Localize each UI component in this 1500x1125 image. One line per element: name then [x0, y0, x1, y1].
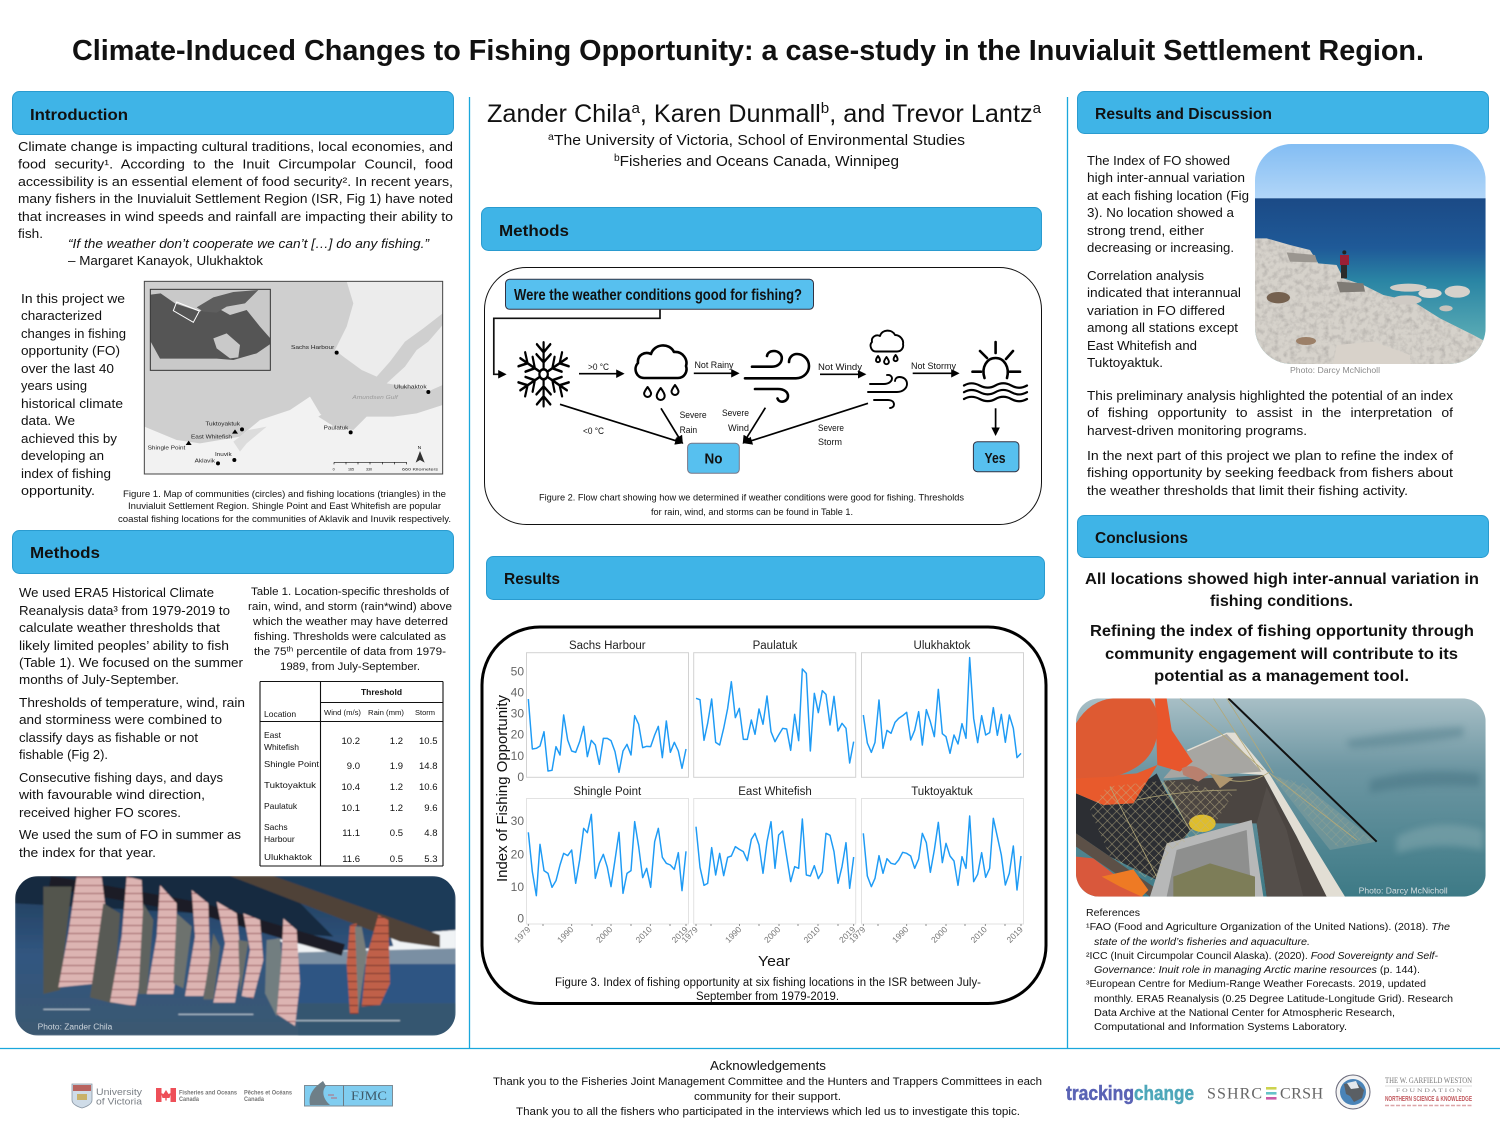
- flow labels: Severe: [680, 410, 707, 421]
- heading: conclusions: [1078, 516, 1488, 558]
- flow outcome: yes: [973, 442, 1019, 472]
- chart: Shingle Point: Shingle Point: [573, 786, 642, 798]
- map: Inuvialuit Settlement Region: Shingle Point: [148, 445, 186, 451]
- photo: hauling fishing net: [1076, 698, 1486, 897]
- chart y axis labels: 20: [511, 728, 524, 742]
- text block: results text: harvest-driven monitoring programs.: [1087, 423, 1307, 438]
- chart y axis labels: 0: [517, 770, 524, 784]
- flow outcome: yes: Yes: [984, 450, 1006, 467]
- authors and affiliations: a: [548, 132, 554, 143]
- text block: results text: strong trend, either: [1087, 223, 1205, 238]
- logo: tracking change: [1066, 1083, 1194, 1105]
- heading: methods centre: Methods: [499, 223, 569, 240]
- map: Inuvialuit Settlement Region: 0: [333, 467, 335, 471]
- flow labels: Not Stormy: [911, 361, 956, 372]
- table 1 caption: Table 1. Location-specific thresholds of: [251, 586, 450, 598]
- text block: methods description: We used ERA5 Historical Climate: [19, 585, 214, 600]
- flow labels: Wind: [728, 423, 749, 434]
- text block: results text: The Index of FO showed: [1087, 153, 1230, 168]
- table 1: thresholds: Storm: [415, 708, 435, 717]
- chart y axis labels: 20: [511, 847, 524, 861]
- text block: methods description: calculate weather thresholds that: [19, 620, 220, 635]
- chart x axis labels: 2019: [1004, 924, 1025, 945]
- chart: East Whitefish: East Whitefish: [738, 786, 812, 798]
- text block: methods description: Reanalysis data³ from 1979-2019 to: [19, 603, 230, 618]
- references: ²ICC (Inuit Circumpolar Council Alaska). (2020). Food Sovereignty and Self-: [1086, 951, 1439, 962]
- text block: introduction paragraph: many fishers in the Inuvialuit Settlement Region (ISR, Fig 1) have noted: [18, 191, 453, 206]
- quote: [68, 236, 430, 268]
- chart x axis labels: 2019: [837, 924, 858, 945]
- authors and affiliations: b: [614, 153, 620, 164]
- map: Inuvialuit Settlement Region: Inuvik: [215, 452, 232, 458]
- logo: circular seal: [1336, 1075, 1370, 1109]
- chart y axis labels: [511, 664, 524, 926]
- text block: results text: [1087, 153, 1454, 498]
- chart: Tuktoyaktuk: Tuktoyaktuk: [911, 786, 973, 798]
- table 1: thresholds: 5.3: [424, 854, 438, 865]
- chart x axis labels: 1990: [555, 924, 576, 945]
- text block: project summary: index of fishing: [21, 466, 111, 481]
- chart y axis labels: 30: [511, 707, 524, 721]
- acknowledgements: Acknowledgements: [710, 1059, 826, 1073]
- figure 1 caption: Inuvialuit Settlement Region. Shingle Point and East Whitefish are popular: [128, 500, 441, 511]
- table 1: thresholds: 10.2: [342, 736, 360, 747]
- text block: project summary: historical climate: [21, 396, 123, 411]
- text block: conclusions: fishing conditions.: [1210, 593, 1353, 610]
- logo: SSHRC CRSH: SSHRC: [1207, 1086, 1262, 1102]
- figure 2 caption: for rain, wind, and storms can be found in Table 1.: [651, 506, 853, 517]
- photo caption: Photo: Darcy McNicholl: [1290, 366, 1380, 375]
- text block: methods description: and storminess were combined to: [19, 712, 222, 727]
- text block: project summary: achieved this by: [21, 431, 118, 446]
- chart: Shingle Point: [526, 786, 688, 924]
- panel: conclusions: [1076, 516, 1488, 1033]
- acknowledgements: [493, 1059, 1042, 1118]
- table 1 caption: rain, wind, and storm (rain*wind) above: [248, 601, 452, 613]
- flow question box: Were the weather conditions good for fishing?: [514, 287, 802, 304]
- heading: introduction: Introduction: [30, 107, 128, 124]
- chart x axis labels: [512, 924, 1025, 945]
- table 1 caption: percentile of data from 1979-: [293, 646, 446, 658]
- chart x axis labels: 2010: [968, 924, 989, 945]
- text block: methods description: Thresholds of temperature, wind, rain: [19, 695, 245, 710]
- flow elbow connector: [494, 309, 660, 374]
- icon: rain cloud: [636, 345, 687, 400]
- heading: results and discussion: [1078, 92, 1488, 134]
- table 1 caption: the 75: [254, 646, 285, 658]
- heading: methods: [12, 530, 454, 574]
- panel: introduction: [12, 92, 454, 524]
- text block: introduction paragraph: food security¹. According to the Inuit Circumpolar Council, food: [18, 156, 453, 172]
- references: ³European Centre for Medium-Range Weather Forecasts. 2019, updated: [1086, 979, 1426, 990]
- logo: Weston Foundation: THE W. GARFIELD WESTON: [1385, 1076, 1472, 1085]
- table 1: thresholds: 10.4: [342, 782, 360, 793]
- figure 1 caption: coastal fishing locations for the communities of Aklavik and Inuvik respectively.: [118, 513, 451, 524]
- panel: flow chart: [484, 268, 1042, 524]
- text block: results text: variation in FO differed: [1087, 303, 1225, 318]
- chart: East Whitefish: [694, 786, 856, 924]
- references: References: [1086, 908, 1140, 919]
- chart: Ulukhaktok: Ulukhaktok: [914, 640, 971, 652]
- map: Inuvialuit Settlement Region: Paulatuk: [324, 425, 349, 431]
- y axis title: Index of Fishing Opportunity: [494, 695, 511, 882]
- text block: introduction paragraph: accessibility is an essential element of food security². In recent years,: [18, 174, 453, 189]
- flow outcome: no: No: [704, 450, 722, 468]
- figure 2 caption: Figure 2. Flow chart showing how we determined if weather conditions were good for fishing. Thresholds: [539, 492, 964, 502]
- table 1: thresholds: Whitefish: [264, 742, 299, 752]
- logo: University of Victoria: University: [96, 1087, 142, 1098]
- table 1: thresholds: Ulukhaktok: [264, 852, 313, 862]
- text block: results text: 3). No location showed a: [1087, 205, 1235, 220]
- chart x axis labels: 1990: [890, 924, 911, 945]
- text block: conclusions: Refining the index of fishing opportunity through: [1090, 623, 1474, 640]
- heading: methods centre: [482, 208, 1042, 250]
- chart x axis labels: 2019: [669, 924, 690, 945]
- table 1: thresholds: Paulatuk: [264, 801, 298, 811]
- photo: drying fish: [15, 876, 456, 1036]
- text block: introduction paragraph: that increases in wind speeds and rainfall are impacting their ability to: [18, 209, 453, 224]
- logos: right sponsors: [1066, 1075, 1472, 1109]
- acknowledgements: Thank you to all the fishers who participated in the interviews which led us to investigate this topic.: [516, 1106, 1020, 1118]
- heading: results: [486, 556, 1044, 600]
- flow labels: Severe: [722, 408, 749, 419]
- heading: results: Results: [504, 571, 560, 588]
- chart y axis labels: 50: [511, 664, 524, 678]
- text block: project summary: changes in fishing: [21, 326, 126, 341]
- flow labels: Not Rainy: [694, 360, 734, 371]
- chart: Tuktoyaktuk: [862, 786, 1024, 924]
- logo: Canada flag and DFO: Canada: [244, 1097, 265, 1103]
- table 1: thresholds: Sachs: [264, 822, 288, 832]
- logo: SSHRC CRSH: [1207, 1086, 1323, 1102]
- text block: introduction paragraph: [18, 139, 453, 241]
- references: Data Archive at the National Center for Atmospheric Research,: [1094, 1008, 1395, 1019]
- icon: sun over water: [964, 342, 1027, 401]
- references: Governance: Inuit role in managing Arctic marine resources (p. 144).: [1094, 965, 1420, 976]
- chart x axis labels: 1979: [679, 924, 700, 945]
- text block: project summary: opportunity (FO): [21, 343, 120, 358]
- text block: project summary: over the last 40: [21, 361, 114, 376]
- text block: project summary: developing an: [21, 448, 104, 463]
- text block: methods description: with favourable wind direction,: [18, 787, 205, 802]
- logo: Canada flag and DFO: Pêches et Océans: [244, 1090, 293, 1096]
- references: Computational and Information Systems Laboratory.: [1094, 1022, 1347, 1033]
- logo: Weston Foundation: F O U N D A T I O N: [1396, 1088, 1462, 1094]
- logo: Canada flag and DFO: [156, 1088, 293, 1103]
- flow labels: Rain: [680, 425, 697, 436]
- references: state of the world’s fisheries and aquaculture.: [1094, 937, 1310, 948]
- map: Inuvialuit Settlement Region: N: [418, 445, 422, 451]
- authors and affiliations: a: [1033, 100, 1042, 117]
- authors and affiliations: Zander Chila: [487, 100, 630, 128]
- text block: project summary: opportunity.: [21, 483, 95, 498]
- text block: methods description: Consecutive fishing days, and days: [19, 770, 223, 785]
- figure 3 caption: Figure 3. Index of fishing opportunity at six fishing locations in the ISR between July-: [555, 977, 981, 989]
- table 1: thresholds: 10.6: [419, 782, 438, 793]
- acknowledgements: community for their support.: [694, 1091, 841, 1103]
- photo: hauling fishing net: Photo: Darcy McNicholl: [1359, 887, 1448, 896]
- table 1: thresholds: 11.1: [342, 828, 360, 839]
- logo: FJMC: FJMC: [351, 1088, 387, 1103]
- text block: methods description: classify days as fishable or not: [19, 730, 198, 745]
- icon: storm: [868, 331, 907, 408]
- text block: project summary: [21, 291, 126, 498]
- flow outcome: no: [688, 443, 739, 473]
- text block: results text: Correlation analysis: [1087, 268, 1205, 283]
- authors and affiliations: a: [631, 100, 641, 117]
- panel: results and discussion: [1078, 92, 1488, 498]
- references: [1086, 908, 1453, 1033]
- flow labels: Severe: [818, 423, 844, 434]
- table 1: thresholds: 1.9: [390, 761, 403, 772]
- text block: results text: at each fishing location (Fig: [1087, 188, 1249, 203]
- text block: methods description: months of July-September.: [19, 672, 179, 687]
- text block: results text: among all stations except: [1087, 320, 1238, 335]
- map: Inuvialuit Settlement Region: Amundsen Gulf: [351, 395, 399, 401]
- chart x axis labels: 1979: [847, 924, 868, 945]
- table 1: thresholds: 11.6: [342, 854, 360, 865]
- text block: conclusions: [1085, 571, 1479, 685]
- map: Inuvialuit Settlement Region: Sachs Harbour: [291, 345, 334, 351]
- table 1 caption: [248, 586, 452, 673]
- table 1: thresholds: [260, 682, 443, 866]
- chart x axis labels: 1990: [723, 924, 744, 945]
- table 1: thresholds: Rain (mm): [368, 708, 404, 717]
- map: Inuvialuit Settlement Region: Tuktoyaktuk: [205, 422, 240, 428]
- text block: results text: indicated that interannual: [1087, 285, 1241, 300]
- references: monthly. ERA5 Reanalysis (0.25 Degree Latitude-Longitude Grid). Research: [1094, 994, 1453, 1005]
- chart x axis labels: 2010: [633, 924, 654, 945]
- text block: project summary: characterized: [21, 308, 102, 323]
- text block: methods description: the index for that year.: [19, 845, 156, 860]
- table 1: thresholds: Harbour: [264, 834, 295, 844]
- flow labels: >0 °C: [588, 362, 609, 373]
- chart: Paulatuk: [694, 640, 856, 777]
- figure 1 caption: [118, 488, 451, 524]
- table 1: thresholds: 1.2: [390, 736, 403, 747]
- panel: results charts: [482, 627, 1046, 1004]
- text block: project summary: In this project we: [21, 291, 125, 306]
- quote: – Margaret Kanayok, Ulukhaktok: [68, 253, 264, 268]
- photo: fisher on rocky shore: [1255, 144, 1486, 364]
- logo: Weston Foundation: [1385, 1076, 1472, 1106]
- authors and affiliations: [487, 100, 1042, 170]
- text block: results text: high inter-annual variation: [1087, 170, 1245, 185]
- icon: snowflake: [517, 342, 570, 406]
- references: ¹FAO (Food and Agriculture Organization of the United Nations). (2018). The: [1086, 922, 1451, 933]
- table 1: thresholds: 10.5: [419, 736, 438, 747]
- table 1: thresholds: 0.5: [390, 854, 403, 865]
- table 1: thresholds: Threshold: [361, 687, 402, 697]
- chart y axis labels: 40: [511, 686, 524, 700]
- table 1: thresholds: 14.8: [419, 761, 438, 772]
- flow labels: <0 °C: [583, 426, 604, 437]
- table 1 caption: which the weather may have deterred: [252, 616, 448, 628]
- chart: Sachs Harbour: [526, 640, 688, 777]
- text block: project summary: years using: [21, 378, 87, 393]
- text block: results text: fishing opportunity by seeking feedback from fishers about: [1087, 465, 1453, 480]
- text block: conclusions: All locations showed high inter-annual variation in: [1085, 571, 1479, 588]
- map: Inuvialuit Settlement Region: 330: [366, 467, 372, 471]
- acknowledgements: Thank you to the Fisheries Joint Management Committee and the Hunters and Trappers Committees in each: [493, 1076, 1042, 1088]
- table 1: thresholds: Tuktoyaktuk: [264, 780, 317, 790]
- chart x axis labels: 1979: [512, 924, 533, 945]
- logo: SSHRC CRSH: CRSH: [1280, 1086, 1323, 1102]
- text block: introduction paragraph: Climate change is impacting cultural traditions, local economies, and: [18, 139, 453, 154]
- table 1: thresholds: 1.2: [390, 803, 403, 814]
- chart: Paulatuk: Paulatuk: [753, 640, 798, 652]
- table 1: thresholds: 10.1: [342, 803, 360, 814]
- chart x axis labels: 2000: [762, 924, 783, 945]
- chart y axis labels: 0: [517, 912, 524, 926]
- flow arrows: [560, 373, 996, 443]
- logo: tracking change: tracking: [1066, 1083, 1134, 1105]
- chart: Sachs Harbour: Sachs Harbour: [569, 640, 646, 652]
- heading: results and discussion: Results and Discussion: [1095, 106, 1272, 123]
- text block: conclusions: community engagement will contribute to its: [1105, 646, 1458, 663]
- text block: methods description: We used the sum of FO in summer as: [19, 827, 242, 842]
- authors and affiliations: , and Trevor Lantz: [829, 100, 1033, 128]
- table 1 caption: 1989, from July-September.: [280, 661, 420, 673]
- map: Inuvialuit Settlement Region: Aklavik: [195, 459, 215, 465]
- text block: results text: Tuktoyaktuk.: [1087, 355, 1163, 370]
- logo: FJMC: [304, 1081, 392, 1106]
- title: Climate-Induced Changes to Fishing Opportunity: a case-study in the Inuvialuit Settlement Region.: [72, 35, 1424, 67]
- table 1: thresholds: East: [264, 730, 282, 740]
- heading: conclusions: Conclusions: [1095, 530, 1188, 547]
- logo: Canada flag and DFO: Fisheries and Oceans: [179, 1090, 238, 1096]
- map: Inuvialuit Settlement Region: 165: [348, 467, 354, 471]
- map: Inuvialuit Settlement Region: Ulukhaktok: [394, 384, 427, 390]
- table 1: thresholds: 4.8: [424, 828, 438, 839]
- heading: methods: Methods: [30, 545, 100, 562]
- panel: methods left: [12, 530, 456, 1036]
- logo: University of Victoria: of Victoria: [96, 1096, 143, 1108]
- flow labels: [583, 360, 956, 448]
- text block: methods description: received higher FO scores.: [19, 805, 181, 820]
- logo: Canada flag and DFO: Canada: [179, 1097, 200, 1103]
- text block: results text: decreasing or increasing.: [1087, 240, 1234, 255]
- logo: University of Victoria: [72, 1084, 143, 1108]
- text block: conclusions: potential as a management tool.: [1154, 668, 1409, 685]
- figure 3 caption: September from 1979-2019.: [696, 991, 839, 1003]
- x axis title: Year: [758, 953, 790, 970]
- text block: project summary: data. We: [21, 413, 75, 428]
- heading: introduction: [12, 92, 454, 134]
- photo: drying fish: Photo: Zander Chila: [38, 1023, 113, 1032]
- text block: results text: This preliminary analysis highlighted the potential of an index: [1087, 388, 1454, 403]
- map: Inuvialuit Settlement Region: [144, 281, 443, 474]
- text block: methods description: [18, 585, 245, 860]
- text block: results text: In the next part of this project we plan to refine the index of: [1087, 448, 1453, 463]
- figure 2 caption: [539, 492, 964, 517]
- table 1: thresholds: 1.2: [390, 782, 403, 793]
- chart x axis labels: 2000: [929, 924, 950, 945]
- table 1: thresholds: 9.6: [424, 803, 438, 814]
- authors and affiliations: The University of Victoria, School of Environmental Studies: [554, 132, 965, 149]
- text block: methods description: (Table 1). We focused on the summer: [19, 655, 244, 670]
- text block: results text: East Whitefish and: [1087, 338, 1197, 353]
- table 1 caption: th: [287, 644, 293, 654]
- table 1: thresholds: Shingle Point: [264, 759, 320, 769]
- map: Inuvialuit Settlement Region: East Whitefish: [191, 434, 232, 440]
- text block: introduction paragraph: fish.: [18, 226, 43, 241]
- table 1 caption: fishing. Thresholds were calculated as: [254, 631, 447, 643]
- flow labels: Not Windy: [818, 362, 862, 373]
- authors and affiliations: , Karen Dunmall: [640, 100, 821, 128]
- flow labels: Storm: [818, 437, 842, 448]
- logos: left sponsors: [72, 1081, 392, 1108]
- chart y axis labels: 10: [511, 880, 524, 894]
- chart y axis labels: 10: [511, 749, 524, 763]
- text block: results text: the weather thresholds that limit their fishing activity.: [1087, 483, 1408, 498]
- quote: “If the weather don’t cooperate we can’t […] do any fishing.”: [68, 236, 430, 251]
- flow question box: [506, 279, 814, 309]
- text block: methods description: fishable (Fig 2).: [19, 747, 108, 762]
- logo: tracking change: change: [1134, 1083, 1194, 1105]
- map: Inuvialuit Settlement Region: 660 Kilometers: [402, 467, 438, 471]
- authors and affiliations: Fisheries and Oceans Canada, Winnipeg: [620, 153, 899, 170]
- figure 3 caption: [555, 977, 981, 1003]
- text block: methods description: likely limited peoples’ ability to fish: [19, 638, 229, 653]
- chart x axis labels: 2010: [801, 924, 822, 945]
- icon: wind: [745, 351, 809, 402]
- chart x axis labels: 2000: [594, 924, 615, 945]
- chart: Ulukhaktok: [862, 640, 1024, 777]
- chart y axis labels: 30: [511, 814, 524, 828]
- table 1: thresholds: 0.5: [390, 828, 403, 839]
- table 1: thresholds: Wind (m/s): [324, 708, 361, 717]
- table 1: thresholds: Location: [264, 709, 296, 719]
- table 1: thresholds: 9.0: [347, 761, 360, 772]
- figure 1 caption: Figure 1. Map of communities (circles) and fishing locations (triangles) in the: [123, 488, 446, 499]
- text block: results text: of fishing opportunity to assist in the interpretation of: [1087, 405, 1453, 420]
- authors and affiliations: b: [821, 100, 829, 117]
